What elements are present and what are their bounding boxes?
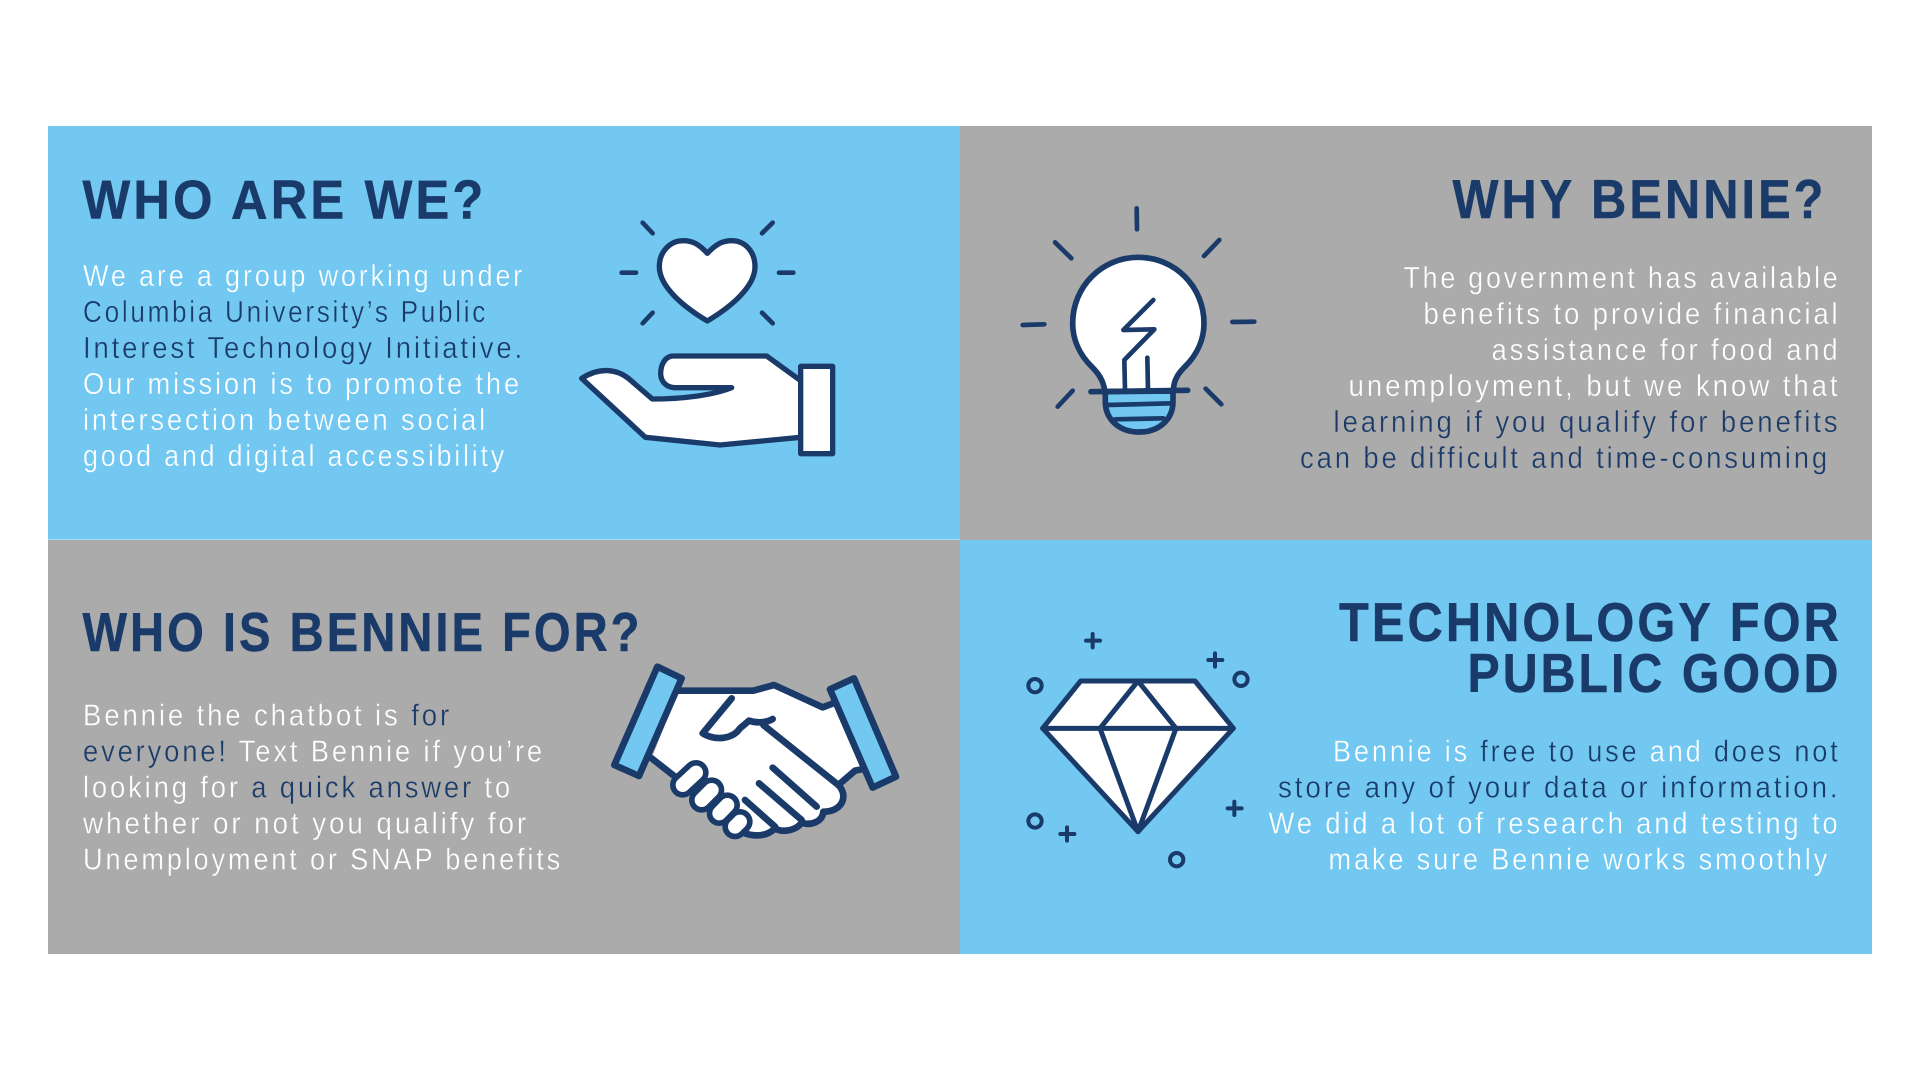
panel background: blue (48, 126, 960, 540)
heading: who are we: WHO ARE WE? (82, 168, 486, 230)
text block: why: learning if you qualify for benefits (1334, 404, 1840, 439)
text block: why: The government has available (1404, 260, 1840, 295)
panel background: gray (48, 540, 960, 954)
text block: mission: Our mission is to promote the (83, 366, 522, 401)
text block: audience: Unemployment or SNAP benefits (83, 842, 563, 876)
panel: who is bennie for (48, 540, 960, 954)
text block: audience (82, 698, 563, 876)
panel: why bennie (960, 126, 1872, 540)
text block: why: assistance for food and (1492, 332, 1840, 367)
text block: audience: Bennie the chatbot is for (83, 698, 452, 732)
panel background: gray (960, 126, 1872, 540)
heading: technology for public good: TECHNOLOGY FOR (1339, 591, 1842, 653)
text block: why: can be difficult and time-consuming (1300, 440, 1830, 475)
text block: mission: Columbia University’s Public (83, 294, 488, 329)
text block: privacy: We did a lot of research and testing to (1268, 806, 1840, 840)
text block: why (1300, 260, 1840, 475)
text block: mission: good and digital accessibility (83, 438, 507, 473)
text block: why: benefits to provide financial (1424, 296, 1840, 331)
icon: handshake (614, 667, 896, 835)
text block: mission: Interest Technology Initiative. (83, 330, 525, 365)
icon: diamond (1028, 634, 1248, 866)
panel: technology for public good (960, 540, 1872, 954)
text block: privacy: store any of your data or information. (1278, 770, 1840, 804)
heading: technology for public good (1339, 591, 1842, 704)
text block: audience: looking for a quick answer to (83, 770, 513, 804)
icon: hand holding heart (582, 223, 833, 454)
text block: mission: intersection between social (83, 402, 488, 437)
panel background: blue (960, 540, 1872, 954)
heading: why bennie: WHY BENNIE? (1452, 168, 1826, 230)
text block: audience: whether or not you qualify for (82, 806, 529, 840)
text block: why: unemployment, but we know that (1348, 368, 1840, 403)
icon: light bulb (1023, 208, 1254, 432)
panel: who are we (48, 126, 960, 540)
text block: privacy: make sure Bennie works smoothly (1328, 842, 1830, 876)
text block: mission: We are a group working under (83, 258, 525, 293)
heading: technology for public good: PUBLIC GOOD (1468, 642, 1842, 704)
text block: privacy: Bennie is free to use and does not (1333, 734, 1840, 768)
text block: mission (83, 258, 525, 473)
heading: who is bennie for: WHO IS BENNIE FOR? (82, 601, 642, 663)
text block: audience: everyone! Text Bennie if you’re (83, 734, 545, 768)
text block: privacy (1268, 734, 1840, 876)
